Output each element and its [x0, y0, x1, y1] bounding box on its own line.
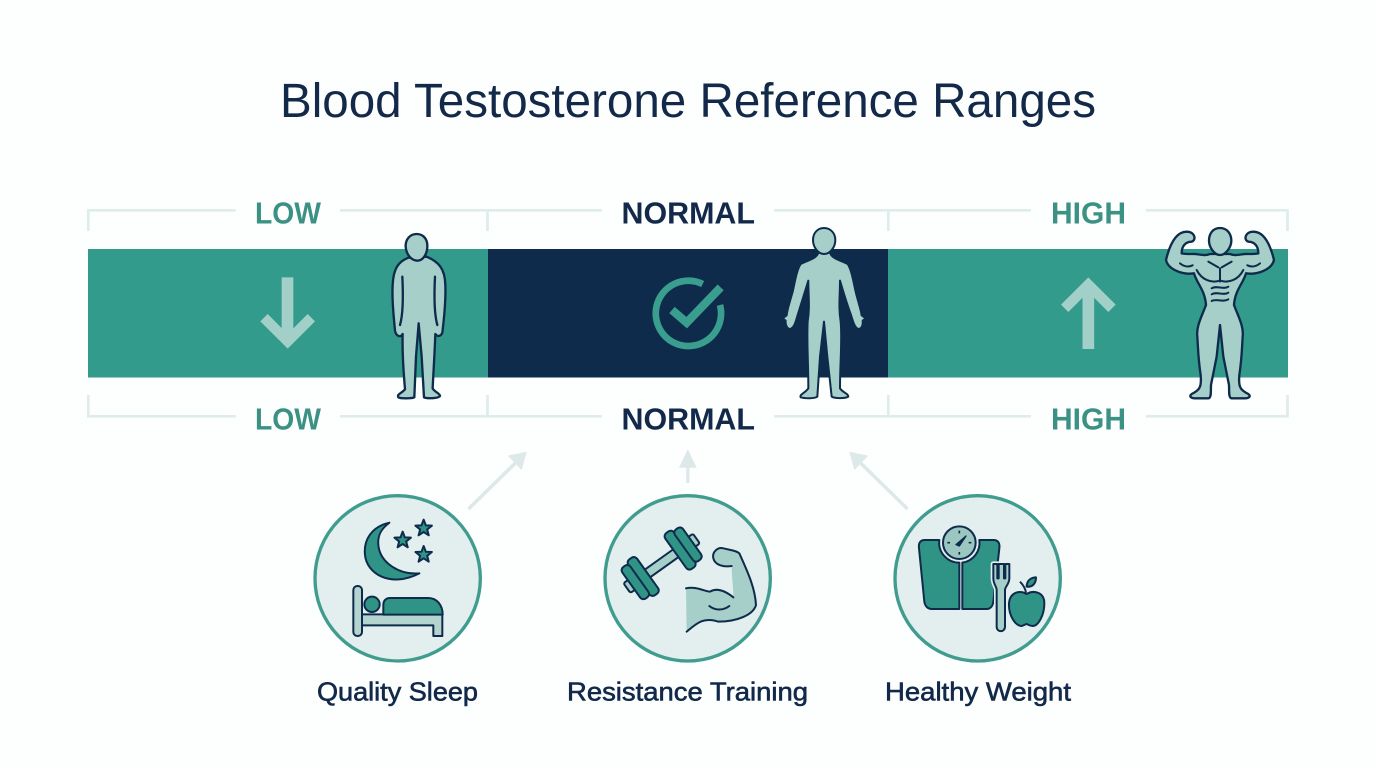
panel: healthy weight — [895, 496, 1060, 661]
bottom label: high: HIGH — [1051, 401, 1126, 436]
range bar: high segment — [888, 249, 1288, 378]
range bar: low segment — [88, 249, 488, 378]
arrow: training to normal — [679, 449, 697, 483]
top label: low: LOW — [255, 195, 322, 230]
figure: average man — [783, 228, 866, 398]
icon: fork outline — [993, 564, 1009, 631]
arrow: sleep to normal — [468, 452, 527, 509]
range bar: normal segment — [488, 249, 888, 378]
icon: up arrow — [1065, 285, 1112, 349]
icon: down arrow — [264, 277, 311, 341]
label: healthy weight: Healthy Weight — [885, 677, 1072, 707]
icon: apple — [1009, 577, 1044, 626]
label: quality sleep: Quality Sleep — [317, 677, 478, 707]
icon: stars — [394, 520, 432, 562]
arrow: weight to normal — [849, 452, 908, 509]
icon: check mark — [656, 281, 721, 346]
panel: quality sleep — [315, 496, 480, 661]
icon: bed — [353, 586, 443, 636]
label: resistance training: Resistance Training — [567, 677, 808, 707]
bottom label: normal: NORMAL — [622, 401, 755, 436]
icon: fork halo — [993, 564, 1009, 631]
figure: muscular man — [1166, 228, 1274, 398]
panel: resistance training — [605, 496, 770, 661]
title: Blood Testosterone Reference Ranges — [280, 75, 1096, 128]
top label: normal: NORMAL — [622, 195, 755, 230]
figure: slim man — [392, 234, 445, 398]
bottom label: low: LOW — [255, 401, 322, 436]
icon: bathroom scale — [919, 526, 999, 609]
top label: high: HIGH — [1051, 195, 1126, 230]
icon: dumbbell — [614, 521, 709, 606]
icon: moon — [365, 523, 419, 579]
icon: flexed arm — [686, 548, 756, 632]
